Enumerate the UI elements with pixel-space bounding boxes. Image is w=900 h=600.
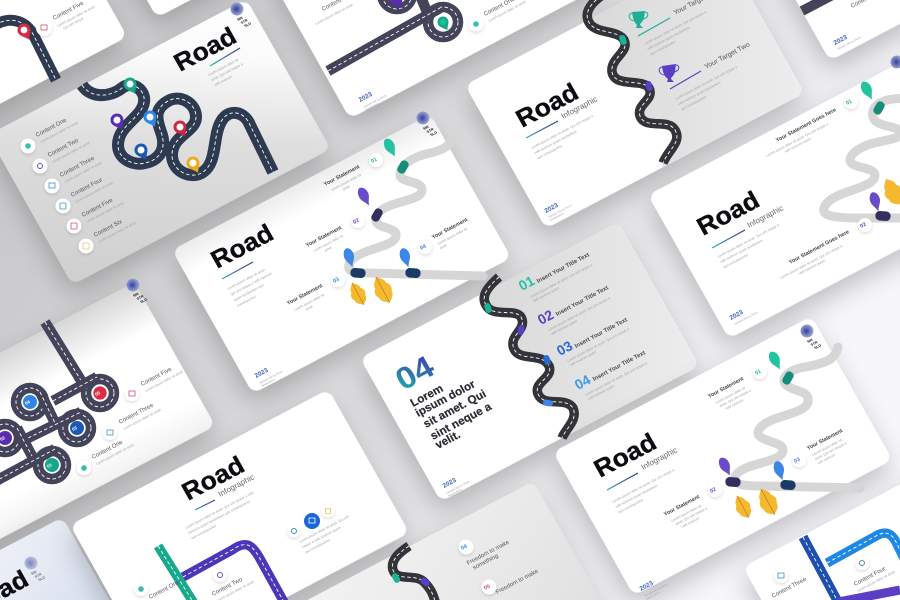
panel: road infographic lower slide (70, 389, 409, 600)
statements: amet. Qui sint neque a (719, 388, 752, 408)
numbered pins (0, 386, 107, 472)
underline (195, 500, 215, 510)
heading block: velit. (434, 429, 463, 452)
footer year (544, 202, 574, 222)
number badges: 01 (845, 99, 853, 107)
statements: Your Statement (286, 283, 324, 307)
statements: Lorem ipsum dolor sit (331, 173, 362, 192)
description: amet. Qui sint neque a (210, 62, 244, 82)
footer year: Sample title by Mnstr (363, 93, 387, 109)
title list: Lorem ipsum dolor sit amet. Qui sint neque a (530, 263, 593, 299)
numbered pins: 05 (94, 390, 101, 397)
heading: Road (177, 451, 249, 506)
title list: 01 (516, 272, 537, 294)
panel: winding road contents slide (0, 0, 331, 285)
statements: Your Statement Goes here (775, 107, 837, 144)
item list: Lorem ipsum dolor sit amet (75, 181, 114, 204)
item list: Content Six (93, 219, 123, 239)
item list (20, 117, 137, 254)
panel: top-left slide (0, 0, 127, 173)
item four: Freedom to make (466, 540, 511, 567)
statements: velit nostrum (725, 398, 744, 411)
statements: velit nostrum quam (784, 137, 812, 154)
statements: velit nostrum quam (798, 259, 826, 276)
statements: Lorem ipsum dolor sit (812, 438, 843, 457)
description: Qui sint neque a velit nostrum (230, 272, 273, 297)
panel: road statement slide (172, 112, 511, 394)
underline (222, 262, 253, 279)
footer year: 2023 (639, 580, 655, 593)
logo: MN (423, 125, 429, 131)
item list: Content Two (47, 138, 80, 159)
target two: Your Target Two (704, 41, 751, 71)
statements: Lorem ipsum dolor sit (437, 227, 468, 246)
item: content five: Lorem ipsum dolor sit amet (57, 5, 96, 28)
panel: knot road slide (0, 278, 215, 562)
statements (286, 164, 470, 316)
logo: SLD (244, 21, 252, 28)
description: nostrum quam laudantium quo consequuntur (187, 499, 251, 535)
content three: Content Three (771, 576, 808, 600)
target two: velit nostrum quam laudantium (677, 80, 722, 106)
item labels: Content Three (118, 402, 155, 426)
item labels: Content Five (140, 366, 174, 388)
target two: Lorem ipsum dolor sit amet. Qui sint neque a (675, 65, 738, 101)
heading block: sint neque a (429, 401, 494, 443)
description: velit nostrum quam laudantium (533, 129, 578, 155)
numbered pins: 04 (24, 399, 31, 406)
logo: SLD (140, 297, 148, 304)
item: content five: Qui sint neque (63, 16, 84, 30)
big number: 04 (389, 349, 441, 397)
title list: Insert Your Title Text (574, 317, 629, 350)
logo: STR (810, 340, 819, 347)
number badges: 01 (370, 157, 378, 165)
target two: quo consequuntur (680, 94, 708, 111)
number badges: 02 (709, 487, 717, 495)
title list: velit nostrum quam (532, 286, 560, 303)
heading block: ipsum dolor (414, 378, 478, 420)
item labels (77, 366, 184, 475)
item labels: Lorem ipsum dolor sit amet (123, 408, 162, 431)
grey road (349, 132, 483, 276)
item labels: Lorem ipsum dolor sit amet (96, 443, 135, 466)
description: velit nostrum quam laudantium (614, 483, 659, 509)
heading block: Lorem (409, 383, 446, 410)
road with red pin (0, 20, 56, 80)
footer year: Sample title by Mnstr (837, 35, 862, 51)
number badges: 04 (419, 243, 428, 252)
content four: Content Four (853, 566, 887, 588)
logo (890, 56, 900, 68)
description: quo consequuntur (190, 523, 218, 540)
content items: Content Two (211, 577, 244, 598)
title list: velit nostrum quam (569, 350, 597, 367)
title list: Insert Your Title Text (536, 252, 591, 285)
logo: STR (426, 127, 435, 134)
footer year: Masterpiece (260, 377, 276, 388)
footer year (639, 580, 670, 600)
item list: Content Five (81, 197, 115, 219)
title list: 02 (535, 306, 556, 328)
footer year: 2023 (442, 477, 458, 490)
description: Lorem ipsum dolor sit amet. Qui sint neque a velit (185, 491, 254, 530)
description: Lorem ipsum dolor sit (208, 58, 239, 77)
underline (607, 473, 638, 490)
item: content five: Content Five (52, 0, 86, 22)
item five: Freedom to make (495, 568, 540, 596)
heading: Road (692, 186, 764, 241)
number badges: 03 (793, 457, 801, 465)
description: quo consequuntur (536, 143, 564, 160)
statements: amet. Qui sint neque a (814, 441, 847, 461)
footer year: Sample title by Mnstr (548, 203, 572, 219)
number badges: 01 (754, 369, 762, 377)
footer year: Sample title by Mnstr (644, 582, 668, 598)
winding road (82, 85, 273, 175)
panel: bottom left slide (0, 517, 143, 600)
item labels: Content One (91, 439, 125, 461)
logo: STR (34, 572, 43, 579)
grey road (824, 99, 900, 218)
number badges: 03 (332, 277, 340, 285)
heading: Road (206, 219, 278, 274)
logo: STR (240, 18, 249, 25)
dark blue road (803, 537, 838, 600)
underline (210, 48, 240, 66)
item: content five (36, 0, 98, 36)
statements: velit nostrum (816, 453, 836, 466)
heading: Road (169, 22, 241, 77)
footer year: 2023 (729, 309, 745, 322)
winding road (483, 277, 574, 438)
green road (158, 546, 195, 600)
logo: MN (237, 16, 243, 22)
panel: top centre slide (269, 0, 608, 119)
footer year: Sample title by Mnstr (734, 310, 759, 326)
statements: velit nostrum (681, 516, 700, 529)
subheading: Infographic (640, 446, 679, 472)
numbered pins: 01 (46, 462, 53, 469)
footer year: 2023 (254, 367, 270, 380)
logo: SLD (814, 343, 822, 350)
subheading: Infographic (746, 204, 785, 230)
statements: amet (439, 243, 448, 250)
description: Lorem ipsum dolor sit amet. Qui sint neque a (612, 468, 675, 504)
statements: amet (324, 245, 333, 253)
statements: Your Statement (707, 376, 745, 400)
description: quo consequuntur (617, 497, 645, 514)
logo (126, 278, 148, 306)
item five: 05 (483, 584, 491, 592)
item list: Lorem ipsum dolor sit amet (52, 141, 91, 164)
statements: Your Statement (323, 164, 361, 188)
footer year: Sample title by Mnstr (446, 479, 470, 495)
statements (766, 107, 850, 284)
number badges: 02 (352, 218, 360, 226)
target one: quo consequuntur (649, 39, 677, 56)
logo (24, 556, 46, 584)
panel: top right small slide (749, 0, 900, 61)
statements: Your Statement Goes here (788, 229, 850, 266)
leaves (345, 273, 397, 308)
statements: Lorem ipsum dolor sit (671, 504, 702, 523)
statements: Lorem ipsum dolor sit amet. Qui sint neque a (780, 244, 843, 280)
subheading: Infographic (217, 473, 256, 499)
heading block: sit amet. Qui (422, 388, 488, 431)
logo: SLD (430, 130, 438, 137)
corner road fragments (838, 590, 900, 600)
number badges (708, 365, 806, 497)
target one (629, 0, 721, 56)
item list: Lorem ipsum dolor sit amet (64, 161, 103, 184)
number badges (844, 95, 872, 232)
logo: MN (31, 570, 37, 576)
item: content one: Lorem ipsum dolor sit amet (488, 0, 527, 23)
footer year: Masterpiece (549, 211, 565, 222)
item four: 04 (460, 543, 469, 552)
heading: Road (511, 78, 583, 133)
title list: Insert Your Title Text (592, 350, 647, 383)
description: velit nostrum quam laudantium (719, 238, 764, 264)
target one: Lorem ipsum dolor sit amet. Qui sint neque a (644, 10, 707, 46)
item: content one (468, 0, 527, 32)
logo: SLD (38, 575, 46, 582)
grey road (735, 347, 860, 488)
target one: velit nostrum quam laudantium (646, 25, 691, 51)
winding road (587, 0, 677, 163)
purple road (183, 545, 285, 600)
item list: Content One (35, 117, 69, 139)
footer year: 2023 (833, 34, 849, 47)
panel: lorem 04 slide (356, 226, 704, 518)
number badges: 02 (859, 222, 867, 230)
statements: amet. Qui sint neque a (675, 506, 708, 526)
statements (663, 376, 849, 532)
footer year (254, 367, 285, 388)
statements: Lorem ipsum dolor sit (715, 386, 746, 405)
title list: 03 (554, 337, 575, 359)
heading: Road (589, 428, 661, 483)
panel: bottom right small slide (743, 431, 900, 600)
description: Lorem ipsum dolor sit amet. (227, 267, 267, 291)
right description: quo consequuntur (304, 537, 332, 554)
item four (458, 539, 515, 573)
leaves (730, 485, 782, 521)
description: Lorem ipsum dolor sit amet. Qui sint neque a (531, 114, 594, 150)
description: consequuntur (236, 294, 257, 308)
statements: Your Statement (431, 217, 469, 241)
description: Lorem ipsum dolor sit amet. Qui sint neque a (717, 223, 780, 259)
item list: Lorem ipsum dolor sit amet (40, 121, 79, 144)
statements: Your Statement (663, 494, 701, 518)
looped road (328, 0, 458, 71)
description: velit nostrum (213, 75, 233, 87)
heading block (409, 378, 494, 452)
pins, cars and leaf (859, 80, 900, 221)
item list: Content Three (59, 155, 96, 179)
underline (526, 121, 558, 138)
logo: MN (133, 292, 139, 298)
pins and cars (342, 137, 421, 278)
panel: road infographic bottom right slide (553, 316, 892, 600)
panel: small top slide corner (76, 0, 415, 18)
item: top left label: Lorem ipsum dolor sit amet (315, 3, 354, 26)
footer year (358, 91, 389, 112)
knot roads (0, 322, 114, 482)
content items (134, 568, 255, 600)
target two (659, 41, 751, 111)
right description: Lorem ipsum dolor sit amet. Qui sint (299, 514, 350, 544)
footer year: 2023 (544, 202, 560, 215)
item labels: Lorem ipsum dolor sit amet (145, 370, 184, 393)
right description: neque a velit nostrum quam (301, 526, 342, 549)
panel: freedom slide (275, 481, 614, 600)
logo (800, 324, 822, 352)
statements: amet (305, 304, 314, 312)
statements: Your Statement (806, 428, 844, 452)
title list: 04 (572, 371, 593, 393)
right icons (288, 504, 334, 538)
pins (108, 75, 204, 176)
content four (853, 556, 896, 593)
title list: velit nostrum quam (550, 319, 578, 336)
light blue road (827, 533, 900, 563)
underline (712, 230, 745, 248)
grey right half (592, 0, 801, 167)
winding road (391, 546, 436, 600)
number badges (331, 153, 432, 287)
logo: MN (807, 338, 813, 344)
item list: Content Four (70, 177, 104, 199)
title list: Lorem ipsum dolor sit amet. Qui sint neque a (548, 296, 611, 332)
title list: Lorem ipsum dolor sit amet. Qui sint neque a (585, 361, 648, 397)
panel: road infographic slide with trophies (465, 0, 820, 240)
title list (516, 252, 650, 401)
logo (230, 2, 252, 30)
numbered pins: 03 (71, 425, 78, 432)
title list: Insert Your Title Text (555, 285, 610, 318)
item four: something (472, 553, 500, 571)
statements: amet (342, 184, 351, 192)
footer year (442, 477, 472, 498)
description: quam laudantium quo (233, 283, 265, 302)
statements: Your Statement (305, 225, 343, 249)
road fragment (802, 0, 842, 11)
grey right half (489, 226, 696, 434)
statements: Lorem ipsum dolor sit (313, 234, 344, 253)
panel: right statement slide (648, 56, 900, 339)
title list: Lorem ipsum dolor sit amet. Qui sint neque a (567, 327, 630, 363)
logo (416, 112, 438, 139)
statements: Lorem ipsum dolor sit amet. Qui sint neque a (766, 122, 829, 158)
footer year: Masterpiece (364, 101, 380, 112)
footer year: 2023 (358, 91, 374, 104)
footer year: Sample title by Mnstr (259, 369, 283, 385)
item list: Lorem ipsum dolor sit amet (98, 221, 137, 244)
content four: Lorem ipsum dolor sit amet (857, 570, 896, 593)
pins and cars (717, 350, 796, 490)
description: quo consequuntur (722, 252, 750, 269)
title list: velit nostrum quam (587, 384, 615, 401)
statements: Lorem ipsum dolor sit (294, 293, 325, 312)
logo: STR (136, 294, 145, 301)
footer year: Masterpiece (447, 487, 463, 498)
subheading: Infographic (560, 95, 599, 121)
item list: Lorem ipsum dolor sit amet (86, 201, 125, 224)
